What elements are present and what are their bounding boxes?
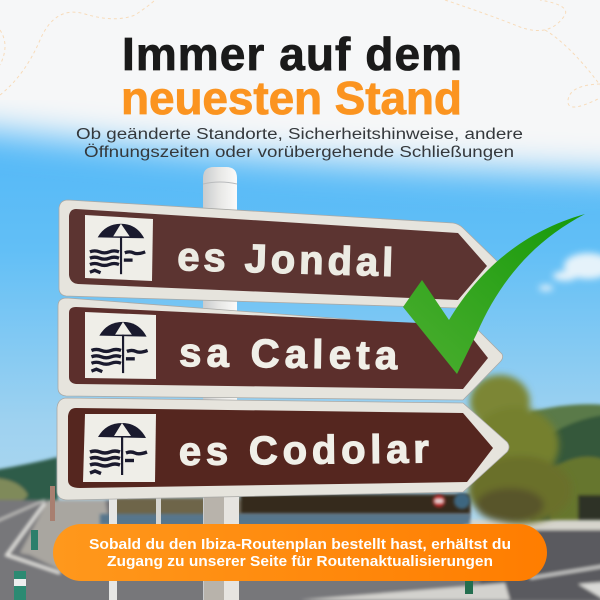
subtitle line 2: Öffnungszeiten oder vorübergehende Schließungen bbox=[84, 143, 514, 161]
dark band behind signs bbox=[240, 494, 470, 514]
title line: Immer auf dem: Immer auf dem bbox=[122, 28, 462, 80]
title line: neuesten Stand: neuesten Stand bbox=[121, 72, 462, 124]
subtitle line 1: Ob geänderte Standorte, Sicherheitshinweise, andere bbox=[76, 126, 523, 143]
background posts bbox=[14, 486, 473, 600]
callout line 2: Zugang zu unserer Seite für Routenaktualisierungen bbox=[107, 553, 493, 570]
subtitle bbox=[76, 126, 523, 161]
label: es Codolar: es Codolar bbox=[179, 427, 429, 474]
cloud bbox=[539, 253, 600, 291]
road signs in background bbox=[433, 493, 470, 509]
distant hills bbox=[0, 404, 600, 525]
callout: orange banner bbox=[53, 524, 547, 581]
sign: es Codolar bbox=[57, 398, 509, 500]
callout line 1: Sobald du den Ibiza-Routenplan bestellt hast, erhältst du bbox=[89, 536, 511, 553]
sign: es Jondal bbox=[59, 200, 498, 308]
icon: beach umbrella bbox=[85, 312, 156, 379]
icon: beach umbrella bbox=[85, 215, 153, 281]
icon: beach umbrella bbox=[83, 414, 156, 482]
label: es Jondal: es Jondal bbox=[177, 235, 394, 285]
decorative dashed lines bbox=[0, 0, 600, 107]
sign: sa Caleta bbox=[58, 298, 503, 400]
title bbox=[121, 28, 462, 124]
ground bbox=[0, 500, 600, 600]
background: paper fade bbox=[0, 0, 600, 176]
trees bbox=[468, 375, 572, 524]
label: sa Caleta: sa Caleta bbox=[179, 331, 398, 378]
icon: green check mark bbox=[403, 214, 585, 374]
main sign post bbox=[203, 167, 239, 600]
